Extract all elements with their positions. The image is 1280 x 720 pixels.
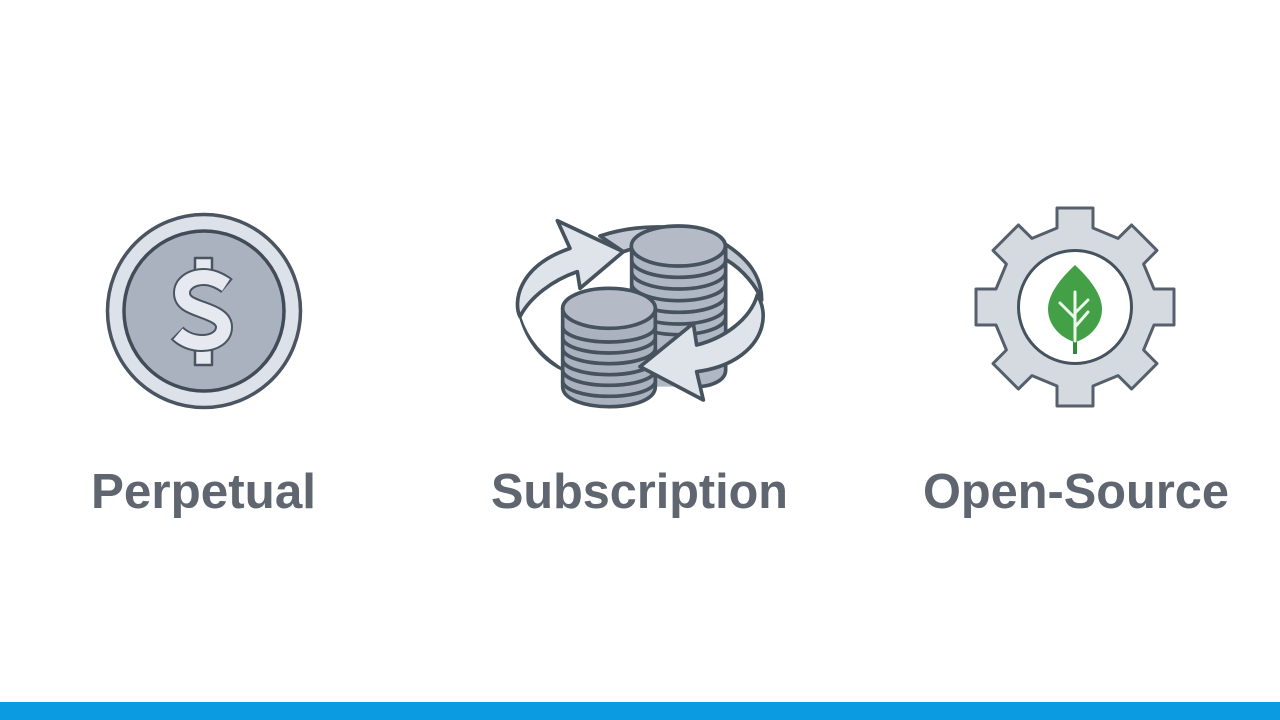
footer bar <box>0 702 1280 720</box>
label: Open-Source: Open-Source <box>923 465 1229 519</box>
arrow: bottom right returning <box>640 295 763 400</box>
back ring band <box>600 227 762 300</box>
back coin stack <box>631 226 726 387</box>
icon: coin stacks with circular arrows <box>517 221 763 407</box>
lower left ring band <box>520 317 567 372</box>
icon: gear with leaf <box>976 208 1174 406</box>
leaf <box>1048 265 1102 354</box>
label: Subscription: Subscription <box>491 465 788 519</box>
icon: dollar coin <box>108 214 300 408</box>
front coin stack <box>563 288 655 407</box>
label: Perpetual: Perpetual <box>91 465 316 519</box>
arrow: top left clockwise <box>517 221 623 317</box>
